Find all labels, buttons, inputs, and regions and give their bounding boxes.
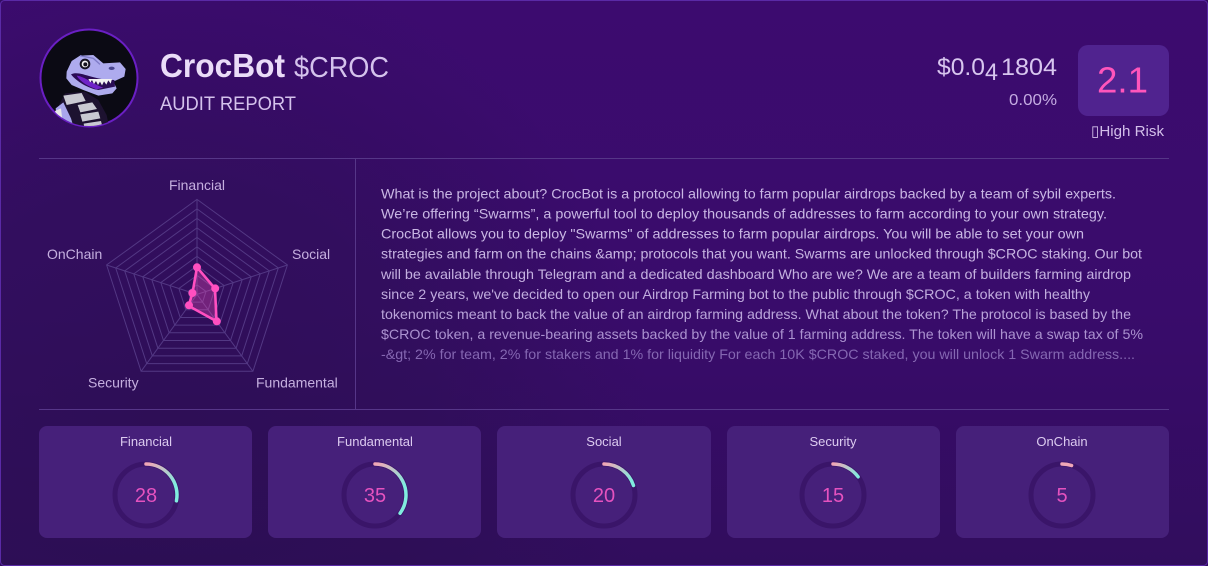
panel: OnChain score: 5 bbox=[1056, 485, 1068, 507]
price: 4 bbox=[985, 59, 998, 86]
project description bbox=[380, 185, 1143, 362]
radar labels: OnChain bbox=[47, 246, 102, 262]
project description: We’re offering “Swarms”, a powerful tool to deploy thousands of addresses to farm according to your own strategy. bbox=[381, 205, 1107, 221]
subtitle: AUDIT REPORT bbox=[160, 94, 296, 115]
price: $0.0 bbox=[937, 54, 985, 81]
score badge bbox=[1078, 45, 1169, 116]
project description: since 2 years, we've decided to open our Airdrop Farming bot to the public through $CROC, a token with healthy bbox=[381, 286, 1090, 302]
radar labels: Fundamental bbox=[256, 374, 338, 390]
panel: Social score: 20 bbox=[593, 485, 615, 507]
project description: strategies and farm on the chains &amp; protocols that you want. Swarms are unlocked through $CROC staking. Our bot bbox=[381, 245, 1142, 261]
radar chart bbox=[47, 177, 338, 390]
radar labels: Financial bbox=[169, 177, 225, 193]
panel: Fundamental score: 35 bbox=[364, 485, 386, 507]
project description: -&gt; 2% for team, 2% for stakers and 1% for liquidity For each 10K $CROC staked, you will unlock 1 Swarm address.... bbox=[381, 346, 1135, 362]
title bbox=[160, 47, 389, 84]
project description: tokenomics meant to back the value of an airdrop farming address. What about the token? The protocol is based by the bbox=[381, 306, 1131, 322]
radar data bbox=[185, 263, 221, 325]
project description: CrocBot allows you to deploy "Swarms" of addresses to farm popular airdrops. You will be able to set your own bbox=[381, 225, 1084, 241]
project description: will be available through Telegram and a dedicated dashboard Who are we? We are a team of builders farming airdrop bbox=[380, 266, 1131, 282]
price: 1804 bbox=[1001, 54, 1057, 81]
price bbox=[937, 54, 1057, 86]
score badge: 2.1 bbox=[1097, 60, 1148, 100]
panel: Security score: 15 bbox=[822, 485, 844, 507]
panel: Financial score: 28 bbox=[135, 485, 157, 507]
panel: Security score bbox=[727, 426, 940, 538]
panel: Social score: Social bbox=[586, 434, 622, 449]
radar labels: Social bbox=[292, 246, 330, 262]
panel: Social score bbox=[497, 426, 711, 538]
panel: Fundamental score: Fundamental bbox=[337, 434, 413, 449]
radar labels: Security bbox=[88, 374, 139, 390]
project description: $CROC token, a revenue-bearing assets backed by the value of 1 farming address. The token will have a swap tax of 5% bbox=[381, 326, 1143, 342]
price change: 0.00% bbox=[1009, 92, 1057, 109]
risk label: ▯High Risk bbox=[1091, 123, 1165, 140]
panel: Financial score: Financial bbox=[120, 434, 172, 449]
title: $CROC bbox=[294, 52, 389, 84]
radar labels bbox=[47, 177, 338, 390]
title: CrocBot bbox=[160, 47, 285, 84]
panel: OnChain score bbox=[956, 426, 1169, 538]
panel: Security score: Security bbox=[810, 434, 857, 449]
panel: Fundamental score bbox=[268, 426, 481, 538]
icon: crocodile avatar bbox=[40, 30, 138, 132]
panel: OnChain score: OnChain bbox=[1036, 434, 1088, 449]
panel: Financial score bbox=[39, 426, 252, 538]
project description: What is the project about? CrocBot is a protocol allowing to farm popular airdrops backed by a team of sybil experts. bbox=[381, 185, 1116, 201]
